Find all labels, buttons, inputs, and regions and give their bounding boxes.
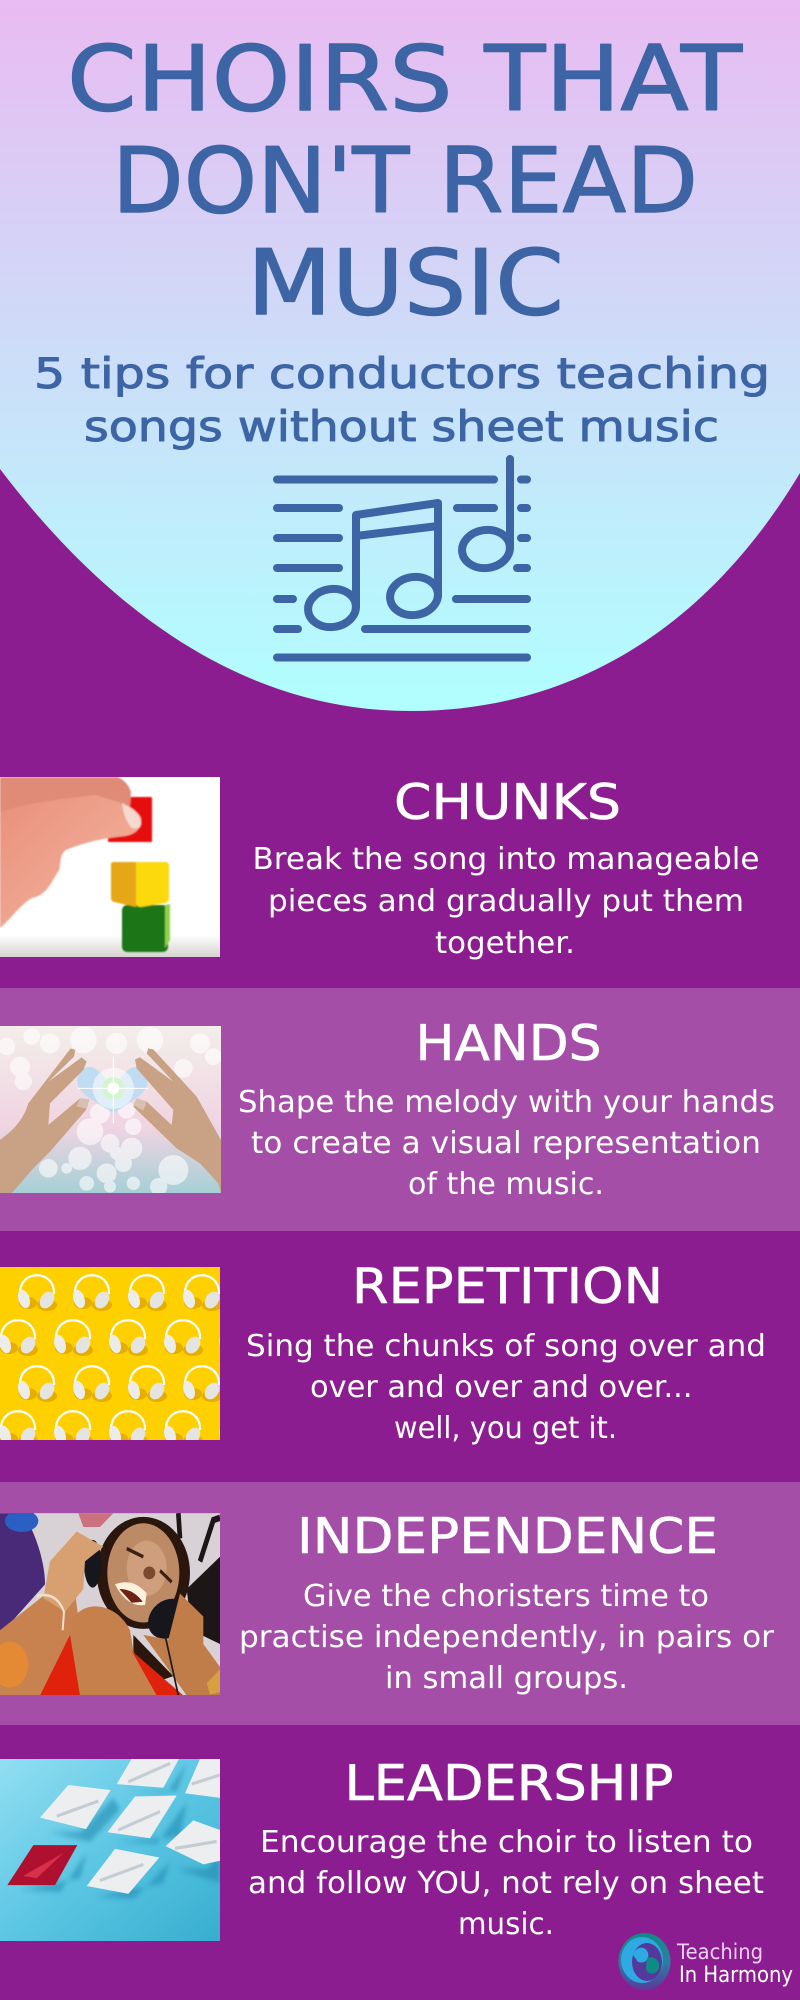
body: hands [238, 1085, 775, 1202]
body: repetition [246, 1329, 766, 1446]
body: leadership: music. [458, 1907, 554, 1942]
body: chunks: together. [435, 926, 575, 961]
panel: independence [0, 1482, 800, 1725]
title [67, 27, 743, 336]
panel: chunks [0, 777, 758, 960]
body: repetition: over and over and over... [310, 1370, 692, 1405]
body: hands: Shape the melody with your hands [238, 1085, 775, 1120]
body: leadership: and follow YOU, not rely on sheet [248, 1866, 764, 1901]
body: hands: to create a visual representation [251, 1126, 761, 1161]
body: repetition: well, you get it. [394, 1411, 617, 1446]
panel: repetition [0, 1266, 764, 1444]
body: independence: practise independently, in pairs or [239, 1620, 775, 1655]
body: chunks [252, 842, 760, 961]
body: hands: of the music. [408, 1167, 604, 1202]
subtitle [34, 349, 770, 451]
panel: hands [0, 988, 800, 1231]
header panel: gradient curved shape [0, 0, 800, 711]
body: chunks: Break the song into manageable [252, 842, 760, 877]
icon: swirl [618, 1933, 670, 1990]
logo text: Teaching [676, 1940, 763, 1964]
heading: independence: INDEPENDENCE [297, 1508, 718, 1565]
heading: leadership: LEADERSHIP [344, 1755, 674, 1812]
title: DON'T READ [112, 129, 698, 234]
body: independence: Give the choristers time to [303, 1579, 709, 1614]
title: MUSIC [247, 231, 564, 336]
heading: repetition: REPETITION [352, 1258, 663, 1315]
panel: leadership [0, 1759, 764, 1941]
photo: hand stacking coloured blocks [0, 777, 220, 957]
icon: music notes on staff [277, 459, 527, 658]
title: CHOIRS THAT [67, 27, 743, 132]
heading: hands: HANDS [416, 1015, 602, 1072]
subtitle: songs without sheet music [84, 402, 719, 451]
heading: chunks: CHUNKS [394, 774, 621, 831]
photo: red paper boat leading white boats [0, 1759, 220, 1941]
photo: hands around glowing heart [0, 1026, 222, 1195]
body: leadership [248, 1825, 764, 1942]
subtitle: 5 tips for conductors teaching [34, 349, 770, 398]
photo: yellow background with rows of headphones [0, 1267, 220, 1440]
body: repetition: Sing the chunks of song over and [246, 1329, 766, 1364]
body: independence: in small groups. [385, 1661, 628, 1696]
body: independence [239, 1579, 775, 1696]
photo: singer wearing headphones [0, 1510, 220, 1697]
body: chunks: pieces and gradually put them [268, 884, 744, 919]
body: leadership: Encourage the choir to listen to [260, 1825, 753, 1860]
logo: Teaching In Harmony [618, 1933, 793, 1990]
